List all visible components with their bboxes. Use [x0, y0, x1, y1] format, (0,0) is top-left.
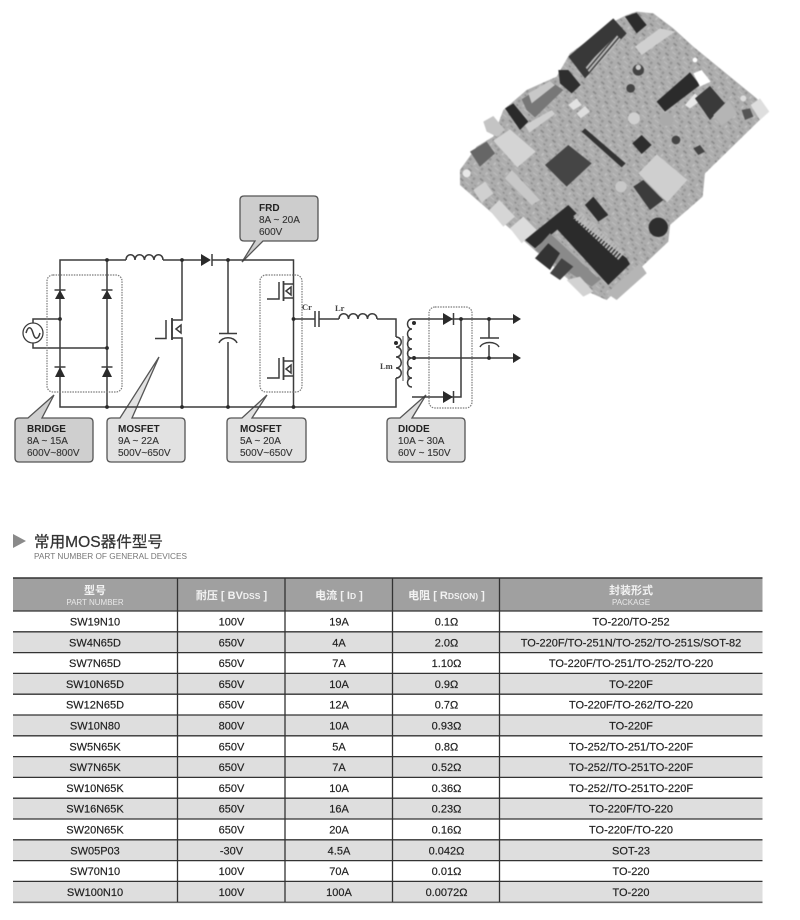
label: Cr: Cr [302, 302, 312, 312]
photo: circuit board [460, 12, 769, 300]
row: SW10N65K: 10A [329, 783, 349, 795]
row: SW10N65K: 0.36Ω [432, 783, 461, 795]
row: SW70N10 [70, 866, 650, 878]
row: SW70N10: 0.01Ω [432, 866, 461, 878]
row: SW10N65D: 650V [219, 679, 245, 691]
bridge diodes [54, 290, 112, 377]
row: SW05P03 [70, 845, 650, 857]
row: SW10N80: 10A [329, 720, 349, 732]
callout: diode: 10A ~ 30A [398, 436, 445, 447]
table header: 型号 [84, 584, 106, 597]
heading subtitle: PART NUMBER OF GENERAL DEVICES [34, 552, 187, 561]
row: SW10N65K: 650V [219, 783, 245, 795]
row: SW12N65D: SW12N65D [66, 700, 124, 712]
heading: common MOS devices [13, 533, 187, 561]
junction dots [58, 258, 491, 409]
row: SW10N65D: 0.9Ω [435, 679, 458, 691]
row: SW10N65D: TO-220F [609, 679, 653, 691]
row: SW12N65D [66, 700, 693, 712]
row: SW7N65D: 650V [219, 658, 245, 670]
callout: MOSFET 2 [227, 395, 306, 462]
row: SW4N65D: 2.0Ω [435, 637, 458, 649]
row: SW4N65D [69, 637, 741, 649]
row: SW7N65K [69, 762, 693, 774]
diode dashed outline [429, 307, 472, 408]
row: SW12N65D: TO-220F/TO-262/TO-220 [569, 700, 693, 712]
row: SW05P03: 4.5A [328, 845, 351, 857]
row: SW16N65K: SW16N65K [66, 804, 124, 816]
row: SW10N80: 800V [219, 720, 245, 732]
row: SW4N65D: SW4N65D [69, 637, 121, 649]
table header: PACKAGE [612, 598, 650, 607]
row: SW10N65K: SW10N65K [66, 783, 124, 795]
icon: AC source [23, 323, 43, 343]
row: SW10N65K: TO-252//TO-251TO-220F [569, 783, 693, 795]
icon: heading triangle [13, 534, 26, 548]
table header: 封装形式 [609, 583, 653, 597]
row: SW5N65K: 650V [219, 741, 245, 753]
callout: MOSFET 1: 500V~650V [118, 448, 171, 459]
icon: resonant capacitor Cr [315, 311, 319, 327]
row: SW7N65K: 0.52Ω [432, 762, 461, 774]
callout: FRD: FRD [259, 203, 280, 214]
table header: PART NUMBER [66, 598, 124, 607]
row: SW10N80: SW10N80 [70, 720, 120, 732]
row: SW10N80: TO-220F [609, 720, 653, 732]
icon: lower MOSFET [267, 357, 294, 380]
row: SW4N65D: 4A [332, 637, 346, 649]
row: SW19N10: SW19N10 [70, 616, 120, 628]
row: SW10N80: 0.93Ω [432, 720, 461, 732]
callout: MOSFET 1: MOSFET [118, 424, 160, 435]
table row shading [13, 632, 762, 902]
callout: MOSFET 1: 9A ~ 22A [118, 436, 159, 447]
row: SW10N65D: SW10N65D [66, 679, 124, 691]
row: SW20N65K: TO-220F/TO-220 [589, 824, 673, 836]
row: SW5N65K [69, 741, 693, 753]
label: Lr: Lr [335, 303, 345, 313]
row: SW16N65K [66, 804, 673, 816]
row: SW7N65D: SW7N65D [69, 658, 121, 670]
table header [13, 578, 762, 611]
label: Lm: Lm [380, 361, 393, 371]
row: SW20N65K [66, 824, 673, 836]
callout: bridge: 600V~800V [27, 448, 80, 459]
icon: rectifier diodes [443, 313, 454, 403]
callout: diode [387, 395, 465, 462]
row: SW05P03: -30V [220, 845, 244, 857]
callout: diode: DIODE [398, 424, 430, 435]
icon: boost diode [201, 254, 212, 266]
icon: transformer [394, 319, 416, 387]
callout: diode: 60V ~ 150V [398, 448, 451, 459]
row: SW19N10 [70, 616, 670, 628]
row: SW7N65K: TO-252//TO-251TO-220F [569, 762, 693, 774]
row: SW7N65K: SW7N65K [69, 762, 121, 774]
row: SW10N65K [66, 783, 693, 795]
row: SW19N10: 100V [219, 616, 245, 628]
row: SW12N65D: 650V [219, 700, 245, 712]
row: SW7N65D [69, 658, 713, 670]
row: SW100N10: 0.0072Ω [426, 887, 467, 899]
row: SW100N10: TO-220 [612, 887, 650, 899]
callout: MOSFET 2: 500V~650V [240, 448, 293, 459]
callout: bridge: 8A ~ 15A [27, 436, 68, 447]
table: MOS part numbers [13, 578, 762, 902]
row: SW19N10: 0.1Ω [435, 616, 458, 628]
row: SW05P03: 0.042Ω [429, 845, 464, 857]
row: SW7N65K: 7A [332, 762, 346, 774]
arrow: output positive [513, 314, 521, 324]
row: SW70N10: TO-220 [612, 866, 650, 878]
callout: FRD: 600V [259, 227, 283, 238]
row: SW16N65K: 650V [219, 804, 245, 816]
row: SW5N65K: TO-252/TO-251/TO-220F [569, 741, 693, 753]
row: SW100N10 [67, 887, 650, 899]
table header: 耐压 [ BVDSS ] [196, 589, 267, 602]
row: SW7N65D: TO-220F/TO-251/TO-252/TO-220 [549, 658, 713, 670]
row: SW20N65K: 20A [329, 824, 349, 836]
row: SW100N10: 100V [219, 887, 245, 899]
icon: PFC inductor [126, 255, 163, 260]
row: SW70N10: 70A [329, 866, 349, 878]
icon: upper MOSFET [267, 281, 294, 301]
callout: bridge: BRIDGE [27, 424, 66, 435]
row: SW10N65D: 10A [329, 679, 349, 691]
row: SW20N65K: 650V [219, 824, 245, 836]
row: SW16N65K: 0.23Ω [432, 804, 461, 816]
row: SW10N80 [70, 720, 653, 732]
row: SW7N65D: 1.10Ω [432, 658, 461, 670]
row: SW16N65K: TO-220F/TO-220 [589, 804, 673, 816]
half-bridge dashed outline [260, 275, 302, 392]
row: SW4N65D: 650V [219, 637, 245, 649]
row: SW05P03: SOT-23 [612, 845, 650, 857]
row: SW5N65K: SW5N65K [69, 741, 121, 753]
callout: FRD [240, 196, 318, 262]
row: SW7N65K: 650V [219, 762, 245, 774]
icon: PFC MOSFET [155, 318, 181, 340]
heading text: 常用MOS器件型号 [34, 533, 163, 551]
row: SW20N65K: 0.16Ω [432, 824, 461, 836]
row: SW12N65D: 12A [329, 700, 349, 712]
callout: MOSFET 1 [107, 357, 185, 462]
row: SW70N10: SW70N10 [70, 866, 120, 878]
row: SW100N10: 100A [326, 887, 353, 899]
table header: 电流 [ ID ] [315, 588, 363, 602]
bridge dashed outline [47, 275, 122, 392]
arrow: output negative [513, 353, 521, 363]
row: SW100N10: SW100N10 [67, 887, 123, 899]
row: SW5N65K: 5A [332, 741, 346, 753]
row: SW12N65D: 0.7Ω [435, 700, 458, 712]
row: SW4N65D: TO-220F/TO-251N/TO-252/TO-251S/SOT-82 [521, 637, 741, 649]
icon: output capacitor [480, 338, 499, 347]
row: SW05P03: SW05P03 [70, 845, 120, 857]
table header: 电阻 [ RDS(ON) ] [408, 588, 485, 602]
icon: bulk capacitor [219, 334, 237, 343]
wiring: rectifier and PFC stage [33, 260, 513, 407]
row: SW5N65K: 0.8Ω [435, 741, 458, 753]
callout: FRD: 8A ~ 20A [259, 215, 300, 226]
row: SW19N10: TO-220/TO-252 [592, 616, 670, 628]
row: SW20N65K: SW20N65K [66, 824, 124, 836]
callout: MOSFET 2: MOSFET [240, 424, 282, 435]
callout: bridge [15, 395, 93, 462]
callout: MOSFET 2: 5A ~ 20A [240, 436, 281, 447]
row: SW19N10: 19A [329, 616, 349, 628]
row: SW16N65K: 16A [329, 804, 349, 816]
row: SW10N65D [66, 679, 653, 691]
circuit diagram [23, 254, 521, 409]
icon: resonant inductor Lr [339, 314, 377, 319]
row: SW70N10: 100V [219, 866, 245, 878]
row: SW7N65D: 7A [332, 658, 346, 670]
